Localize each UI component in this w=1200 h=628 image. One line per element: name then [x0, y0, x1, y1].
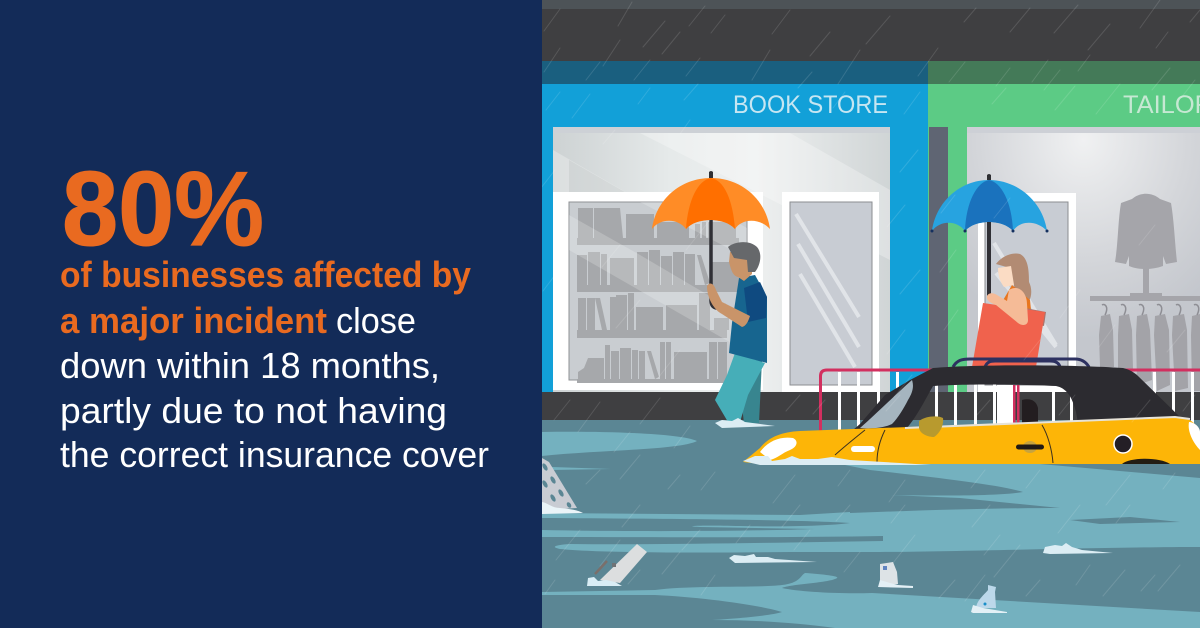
icon: submerged barricade	[541, 458, 583, 514]
bow wave	[743, 456, 931, 465]
text: line two: close	[336, 300, 416, 341]
bag strap	[1018, 307, 1046, 326]
bookshelves	[577, 208, 739, 383]
door glass	[790, 202, 872, 385]
tail lights	[1189, 422, 1200, 450]
label: book store sign: BOOK STORE	[733, 91, 888, 119]
text: line one: of businesses affected by	[60, 254, 471, 295]
tailor door frame	[978, 193, 1076, 392]
face	[729, 250, 752, 281]
icon: blue umbrella	[930, 174, 1048, 296]
panel: tailor front	[928, 61, 1200, 392]
car beltline	[905, 417, 1190, 428]
door reflections	[796, 214, 859, 367]
door handle	[1016, 441, 1044, 453]
text: line three: down within 18 months,	[60, 345, 440, 386]
face	[998, 266, 1014, 287]
shoe splash	[715, 418, 775, 428]
wheel arch	[1122, 459, 1170, 464]
illustration: flooded street	[541, 0, 1200, 628]
tailor door glass	[985, 202, 1068, 385]
person: woman with blue umbrella	[930, 174, 1048, 367]
orange top	[1002, 285, 1031, 312]
door frame	[782, 192, 879, 392]
icon: floating carton	[878, 562, 913, 588]
tote bag	[972, 303, 1045, 367]
panel: navy text background	[0, 0, 542, 628]
icon: orange umbrella	[652, 171, 770, 308]
hair	[728, 242, 760, 272]
text: line two: a major incident	[60, 300, 327, 341]
panel: book store front	[542, 61, 928, 392]
shirt	[729, 275, 767, 363]
yellow car	[743, 359, 1200, 465]
hair	[996, 253, 1031, 301]
rain	[541, 0, 1200, 601]
roof rack	[953, 359, 1089, 367]
headlight	[760, 438, 797, 460]
icon: floating bottle	[971, 585, 1007, 613]
car seat	[1022, 399, 1038, 423]
heading: 80%: 80%	[62, 150, 264, 268]
book window glass	[569, 202, 747, 380]
window reflection	[569, 202, 747, 352]
sleeve	[744, 282, 767, 322]
fuel cap	[1114, 435, 1132, 453]
flood water	[542, 420, 1200, 628]
text block: statistic	[60, 150, 489, 475]
car body	[743, 417, 1200, 464]
pillar	[929, 127, 948, 392]
door lines	[835, 425, 1053, 463]
back leg	[742, 360, 762, 423]
windshield	[860, 380, 913, 428]
pavement wall	[542, 392, 1200, 420]
side marker	[851, 446, 875, 452]
text: line four: partly due to not having	[60, 390, 447, 431]
hanging garments	[1099, 314, 1200, 391]
arm	[707, 283, 750, 327]
person: man with orange umbrella	[652, 171, 775, 428]
building upper storey	[542, 0, 1200, 61]
icon: water splash right	[1043, 543, 1113, 554]
icon: water splash	[729, 554, 817, 563]
book window frame	[553, 192, 763, 390]
text: line five: the correct insurance cover	[60, 434, 489, 475]
front leg	[715, 353, 765, 422]
arm	[987, 288, 1028, 325]
car roof	[853, 365, 1180, 430]
railing	[820, 370, 1200, 432]
icon: floating plank	[587, 544, 647, 586]
jacket on stand	[1090, 194, 1200, 301]
wing mirror	[919, 416, 943, 437]
